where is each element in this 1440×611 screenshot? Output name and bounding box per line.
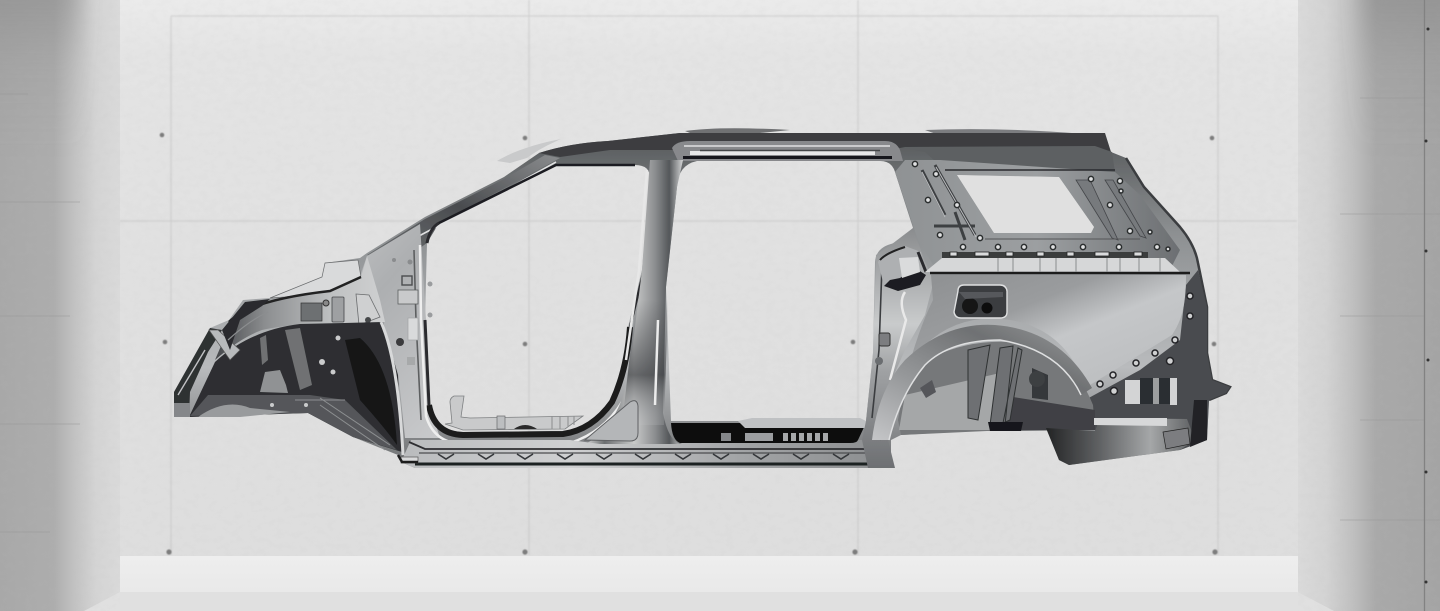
quarter panel [905, 275, 1186, 388]
car body [174, 128, 1230, 468]
B-pillar [585, 160, 683, 444]
front fender rail [215, 256, 385, 360]
rear door bottom dark band [671, 418, 866, 443]
roof rail dark band [539, 133, 1111, 157]
hood edge outline [270, 260, 361, 298]
right side wall [1298, 0, 1440, 611]
cowl and front pillar panel [245, 224, 440, 438]
belt reinforcement strip [925, 252, 1190, 273]
A-pillar [367, 155, 560, 262]
fender rail cutouts [301, 258, 432, 365]
body silhouette with door openings [174, 133, 1230, 468]
rear door header rail [672, 141, 903, 161]
hinge pillar edge [381, 322, 403, 455]
wall anchor holes [160, 133, 1218, 555]
floor [84, 556, 1334, 611]
rear lower dark structure [1085, 270, 1230, 450]
rear bumper crash box [1046, 400, 1207, 465]
front crash rail and bracket [174, 299, 270, 417]
inner floor seen through front door [445, 396, 583, 430]
upper quarter panel [895, 160, 1180, 270]
rear pillar dark edge [1126, 158, 1230, 400]
background: concrete back wall [120, 0, 1298, 556]
upper quarter rivets [912, 161, 1170, 251]
front inner lower gusset [585, 401, 638, 441]
rear corner pads and rivets [1097, 293, 1193, 405]
left side wall [0, 0, 120, 611]
C-pillar [862, 228, 934, 468]
sill beam [401, 440, 891, 468]
roof spoiler wedge [497, 139, 561, 163]
C-pillar latch bracket [878, 246, 926, 291]
front door frame ring [414, 178, 652, 444]
rear arch flare [872, 325, 1092, 440]
front wheel well [189, 322, 402, 452]
rear wheel well interior [898, 342, 1095, 435]
fuel filler recess [954, 285, 1007, 318]
roof rack strips [685, 128, 1105, 139]
rear roof panel [900, 146, 1115, 172]
